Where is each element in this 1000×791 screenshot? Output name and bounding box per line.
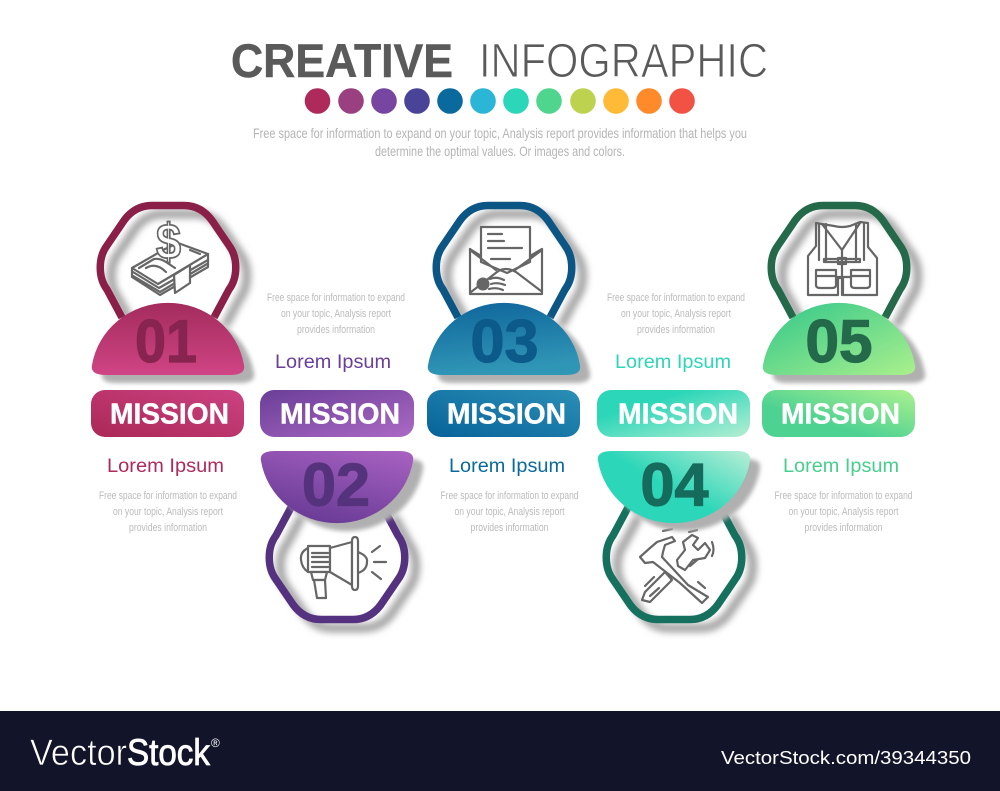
mission pill 02 xyxy=(260,390,414,437)
body text 03 xyxy=(440,490,578,534)
icon: money stack: $ xyxy=(156,214,181,270)
hexagon ring 04 xyxy=(606,508,742,620)
subtitle: Free space for information to expand on your topic, Analysis report provides information that helps you xyxy=(253,125,747,141)
body text 01: provides information xyxy=(129,522,207,534)
icon: envelope xyxy=(470,227,542,294)
mission pill 04: MISSION xyxy=(618,398,738,430)
title xyxy=(231,34,768,88)
mission pill 05: MISSION xyxy=(781,398,900,430)
mission pill 05 xyxy=(762,390,915,437)
dome 04 xyxy=(598,451,750,523)
icon: hammer and wrench xyxy=(640,529,714,603)
mission pill 02: MISSION xyxy=(280,398,400,430)
body text 01: on your topic, Analysis report xyxy=(113,506,223,518)
icon: money stack xyxy=(132,214,208,295)
body text 04 xyxy=(607,292,745,336)
number 04: 04 xyxy=(640,452,709,518)
subtitle: determine the optimal values. Or images and colors. xyxy=(375,143,625,159)
number 01: 01 xyxy=(135,308,197,375)
colour dots row xyxy=(305,88,695,114)
body text 04: Free space for information to expand xyxy=(607,292,745,304)
number 03: 03 xyxy=(470,308,538,375)
footer url: VectorStock.com/39344350 xyxy=(721,747,971,768)
body text 05 xyxy=(774,490,912,534)
footer logo: Vector xyxy=(30,732,127,773)
panel: step 03 xyxy=(427,206,590,534)
panel: step 02 xyxy=(260,292,423,628)
hexagon ring 05 xyxy=(771,206,907,318)
mission pill 04 xyxy=(597,390,750,437)
mission pill 01: MISSION xyxy=(110,398,229,430)
body text 02: on your topic, Analysis report xyxy=(281,308,391,320)
body text 04: on your topic, Analysis report xyxy=(621,308,731,320)
body text 02 xyxy=(267,292,405,336)
body text 01 xyxy=(99,490,237,534)
panel: step 01 xyxy=(91,206,254,534)
heading 02: Lorem Ipsum xyxy=(275,352,391,373)
panel: step 04 xyxy=(597,292,760,628)
icon: megaphone xyxy=(301,537,386,598)
body text 02: provides information xyxy=(297,324,375,336)
title: INFOGRAPHIC xyxy=(479,35,768,88)
body text 04: provides information xyxy=(637,324,715,336)
heading 04: Lorem Ipsum xyxy=(615,352,731,373)
heading 05: Lorem Ipsum xyxy=(783,456,899,477)
body text 02: Free space for information to expand xyxy=(267,292,405,304)
dome 05 xyxy=(763,303,915,375)
icon: vest xyxy=(808,222,877,295)
mission pill 03 xyxy=(427,390,580,437)
dome 02 xyxy=(261,451,413,523)
body text 05: provides information xyxy=(804,522,882,534)
hexagon ring 01 xyxy=(100,206,236,318)
body text 03: provides information xyxy=(470,522,548,534)
body text 05: Free space for information to expand xyxy=(774,490,912,502)
panel: step 05 xyxy=(762,206,925,534)
body text 05: on your topic, Analysis report xyxy=(788,506,898,518)
heading 01: Lorem Ipsum xyxy=(107,456,224,477)
title: CREATIVE xyxy=(231,34,453,87)
dome 01 xyxy=(92,303,244,375)
hexagon ring 03 xyxy=(436,206,572,318)
mission pill 03: MISSION xyxy=(447,398,566,430)
number 02: 02 xyxy=(302,452,370,518)
hexagon ring 02 xyxy=(269,508,405,620)
registered mark: ® xyxy=(211,736,220,750)
subtitle xyxy=(253,125,747,159)
heading 03: Lorem Ipsum xyxy=(449,456,565,477)
footer logo xyxy=(30,732,210,773)
dome 03 xyxy=(428,303,580,375)
mission pill 01 xyxy=(91,390,244,437)
body text 01: Free space for information to expand xyxy=(99,490,237,502)
number 05: 05 xyxy=(806,308,872,375)
footer bar xyxy=(0,711,1000,791)
footer logo: Stock xyxy=(127,732,210,773)
body text 03: on your topic, Analysis report xyxy=(454,506,564,518)
body text 03: Free space for information to expand xyxy=(440,490,578,502)
